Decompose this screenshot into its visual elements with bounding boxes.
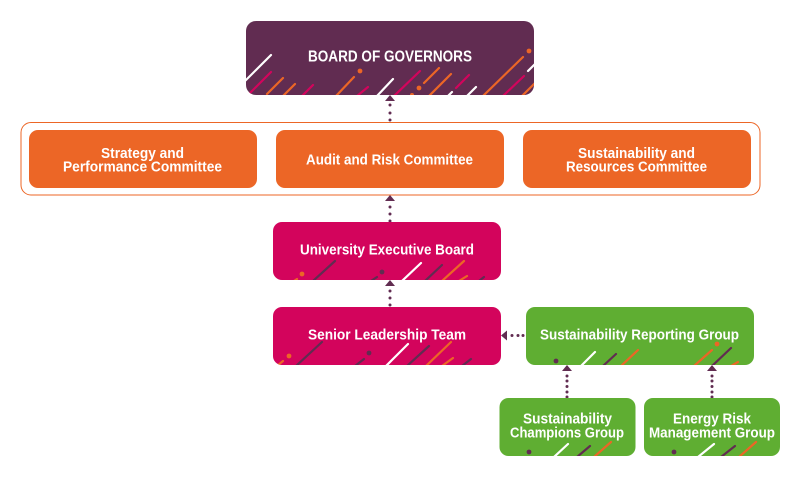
- box: Sustainability and Resources Committee: Resources Committee: [566, 160, 707, 176]
- panel: Senior Leadership Team: [273, 307, 501, 366]
- arrow: energy risk group to reporting group: [707, 365, 717, 398]
- box: Sustainability and Resources Committee: [523, 130, 751, 188]
- panel: Sustainability Champions Group: [500, 398, 636, 457]
- box: Strategy and Performance Committee: [29, 130, 257, 188]
- panel: Energy Risk Management Group: [644, 398, 780, 457]
- panel: Sustainability Reporting Group: [526, 307, 754, 366]
- panel: Senior Leadership Team: Senior Leadership Team: [308, 328, 466, 344]
- panel: Sustainability Champions Group: Champions Group: [510, 426, 624, 442]
- box: Sustainability and Resources Committee: Sustainability and: [578, 146, 695, 162]
- panel: committees container: [21, 122, 760, 195]
- arrow: champions group to reporting group: [562, 365, 572, 398]
- arrow: executive board to committees: [385, 195, 395, 222]
- arrow: senior leadership to executive board: [385, 280, 395, 306]
- panel: Energy Risk Management Group: Energy Risk: [673, 412, 752, 428]
- panel: Sustainability Reporting Group: Sustainability Reporting Group: [540, 328, 739, 344]
- panel: University Executive Board: [273, 222, 501, 281]
- box: Strategy and Performance Committee: Strategy and: [101, 146, 184, 162]
- arrow: reporting group to senior leadership: [501, 330, 524, 340]
- panel: Energy Risk Management Group: Management Group: [649, 426, 775, 442]
- box: Strategy and Performance Committee: Performance Committee: [63, 160, 222, 176]
- panel: Board of Governors: [245, 21, 535, 97]
- panel: Sustainability Champions Group: Sustainability: [523, 412, 612, 428]
- arrow: committees to board: [385, 95, 395, 122]
- heading: Board of Governors: BOARD OF GOVERNORS: [308, 48, 472, 66]
- box: Audit and Risk Committee: Audit and Risk Committee: [306, 152, 473, 168]
- panel: University Executive Board: University Executive Board: [300, 242, 474, 258]
- box: Audit and Risk Committee: [276, 130, 504, 188]
